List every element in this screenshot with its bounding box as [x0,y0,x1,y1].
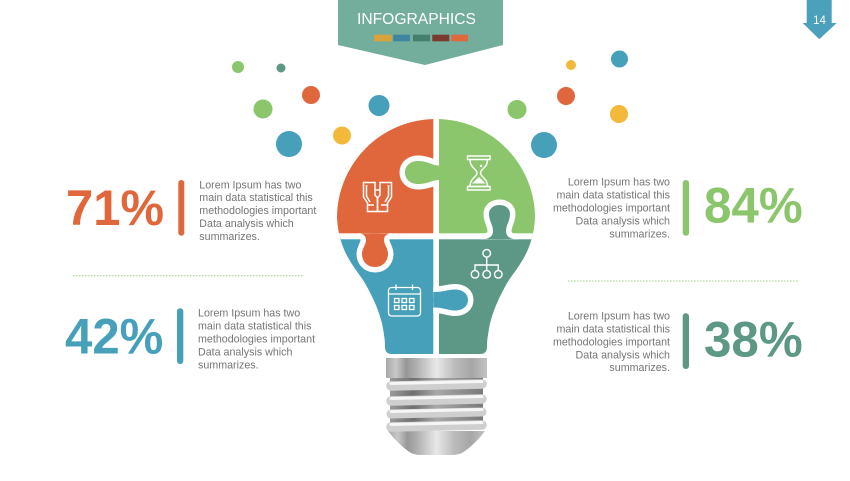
icon: calendar [388,284,420,316]
stat: 71%: main data statistical this [199,192,313,204]
stat: 42%: Data analysis which [198,347,293,359]
stat: 71%: 71% [66,180,164,236]
banner colour swatches [374,35,468,41]
stat: 42% [65,308,315,372]
stat: 84%: methodologies important [553,203,670,215]
puzzle light bulb [337,119,535,354]
stat: 42%: summarizes. [198,360,259,372]
stat: 38% [553,310,803,374]
bulb metal screw base [386,358,487,455]
stat: 42%: Lorem Ipsum has two [198,308,300,320]
divider left [73,275,303,277]
stat: 42%: 42% [65,308,163,364]
stat: 84%: 84% [704,177,803,233]
stat: 71% [66,179,316,243]
stat: 71%: summarizes. [199,231,260,243]
stat: 71%: methodologies important [199,205,316,217]
stat: 84%: Data analysis which [576,216,670,228]
title banner [338,0,503,65]
icon: binoculars [364,182,392,212]
stat: 84% [553,177,803,240]
stat: 42%: methodologies important [198,334,315,346]
stat: 38%: 38% [704,312,803,368]
stat: 71%: Lorem Ipsum has two [199,179,302,191]
icon: hourglass [468,156,490,190]
stat: 38%: summarizes. [609,362,670,374]
stat: 38%: methodologies important [553,336,670,348]
stat: 84%: Lorem Ipsum has two [568,177,670,189]
decorative idea dots [232,50,628,158]
icon: org chart [471,250,502,278]
divider right [568,280,798,282]
page number arrow: 14 [813,15,826,27]
stat: 38%: Lorem Ipsum has two [568,310,670,322]
stat: 38%: main data statistical this [557,323,670,335]
banner title text: INFOGRAPHICS [357,11,476,28]
stat: 84%: summarizes. [609,228,670,240]
stat: 71%: Data analysis which [199,218,294,230]
stat: 38%: Data analysis which [576,349,670,361]
stat: 42%: main data statistical this [198,321,311,333]
page number arrow [803,0,837,39]
stat: 84%: main data statistical this [557,190,670,202]
